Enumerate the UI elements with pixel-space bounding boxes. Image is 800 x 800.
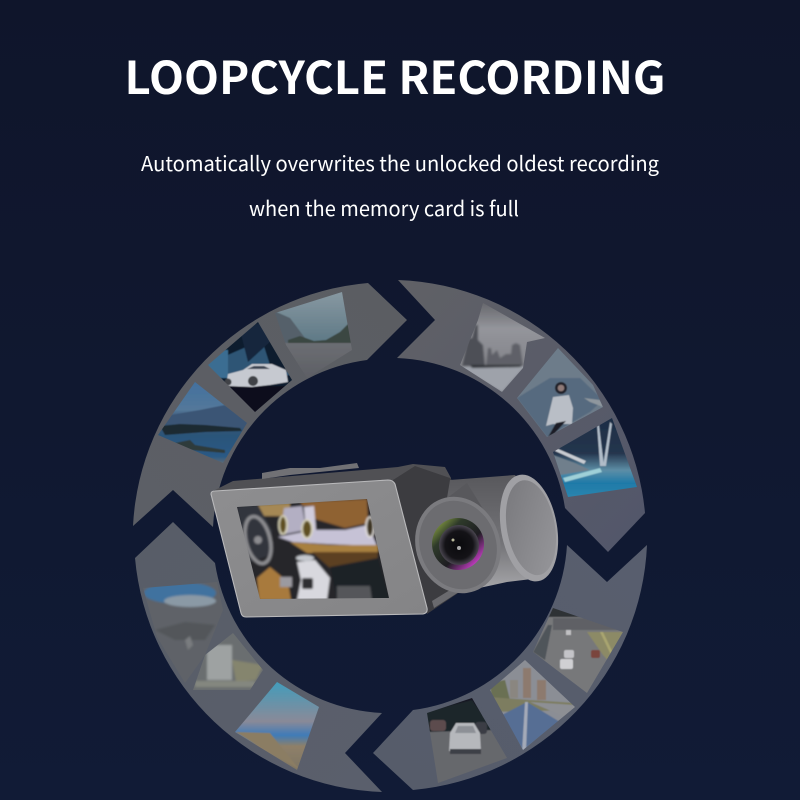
photo: grey city skyline — [460, 304, 545, 392]
rear cap — [492, 470, 566, 586]
arrow segment: top left — [133, 283, 407, 527]
camera body right side — [393, 466, 470, 614]
photo: lake and mountains — [158, 382, 247, 463]
orange seat — [257, 567, 291, 600]
barrel — [440, 475, 540, 590]
dash cam — [211, 463, 566, 617]
camera body top side — [211, 464, 451, 510]
photo: road under blue sky — [144, 584, 218, 650]
white car — [226, 364, 288, 387]
photo: blue tunnel — [553, 418, 637, 497]
lens ring — [402, 485, 514, 605]
white console — [297, 560, 330, 600]
air vents — [279, 516, 287, 534]
steering wheel area — [237, 505, 272, 562]
circular loop of four arrows — [133, 280, 647, 792]
lower tan — [290, 542, 378, 553]
photo: pale buildings — [193, 633, 263, 690]
photo: beach and sea — [235, 682, 319, 770]
photo: empty road — [276, 292, 352, 362]
front panel — [211, 480, 427, 617]
photo: white car at night — [208, 322, 292, 412]
dashboard upper tan — [258, 503, 290, 516]
subtitle text: when the memory card is full — [249, 192, 519, 222]
arrow segment: bottom right — [373, 545, 647, 790]
lilac band — [278, 525, 377, 546]
photo: woman on a road — [517, 348, 603, 437]
subtitle text: Automatically overwrites the unlocked oldest recording — [141, 147, 659, 177]
lower right dark and floor — [330, 558, 390, 600]
photo: highway traffic — [533, 608, 623, 693]
lens glass — [432, 518, 484, 570]
photo: buildings and road — [490, 660, 575, 750]
title: LOOPCYCLE RECORDING — [124, 42, 666, 107]
photo: silver car rear view — [427, 698, 507, 783]
lens hood — [438, 483, 485, 530]
screen with car interior — [237, 499, 389, 599]
woman figure — [546, 382, 573, 437]
top mounting bracket — [262, 463, 359, 479]
arrow segment: bottom left — [135, 522, 382, 792]
silver car — [449, 723, 481, 751]
cars — [560, 630, 600, 669]
subtitle text — [141, 147, 659, 222]
arrow segment: top right — [397, 280, 645, 552]
